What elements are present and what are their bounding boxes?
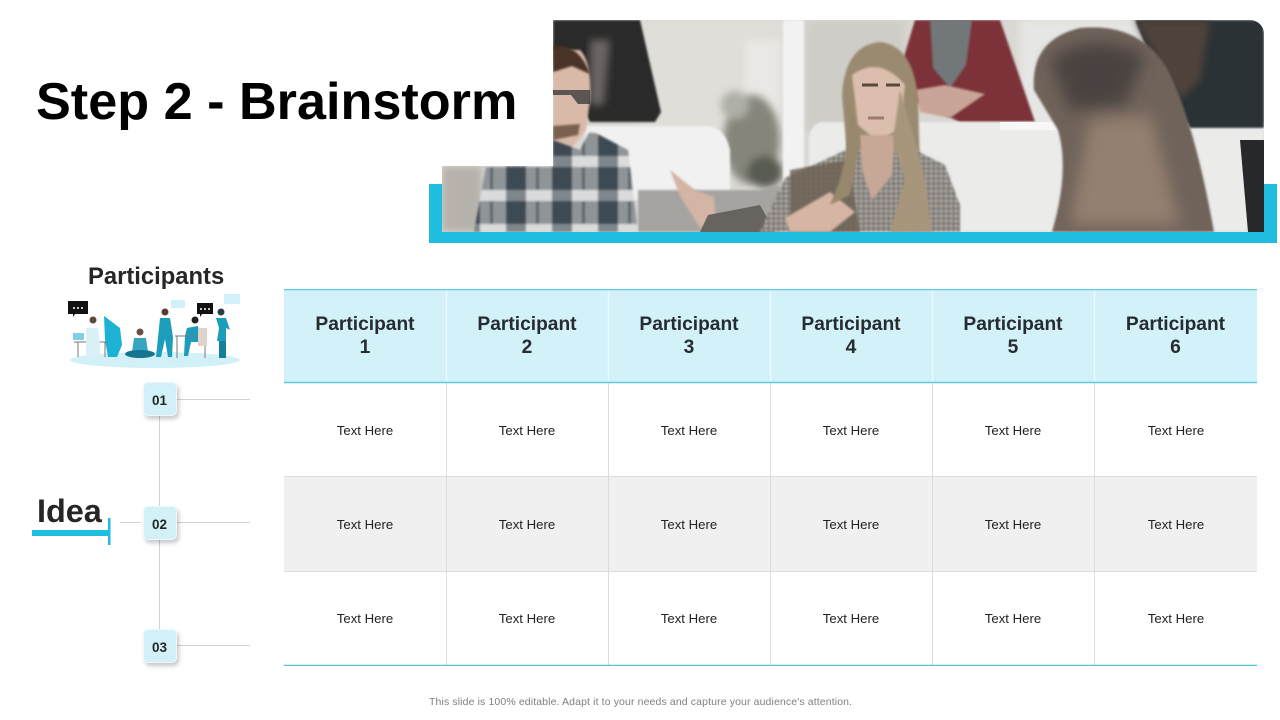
plant <box>721 91 783 188</box>
row 3 cells: Text Here <box>823 611 879 626</box>
illustration: team of participants <box>68 294 240 368</box>
row 1 cells <box>337 423 1204 438</box>
row 2 cells: Text Here <box>823 517 879 532</box>
row 3 cells: Text Here <box>499 611 555 626</box>
timeline connectors <box>120 399 250 646</box>
badge 03: 03 <box>152 640 167 655</box>
badge 03 <box>143 629 177 663</box>
red sweater man <box>903 20 1035 122</box>
row 2 cells: Text Here <box>985 517 1041 532</box>
cyan band behind photo <box>429 184 1277 243</box>
plaid shirt <box>474 130 638 232</box>
header row: 1 <box>360 337 370 358</box>
badge 01 <box>143 382 177 416</box>
header row: 4 <box>846 337 856 358</box>
row 2 cells: Text Here <box>499 517 555 532</box>
idea label: Idea <box>37 493 102 529</box>
dark laptop at right <box>1240 140 1264 232</box>
row 1 cells: Text Here <box>1148 423 1204 438</box>
row 2 cells: Text Here <box>1148 517 1204 532</box>
header row: Participant <box>1126 314 1225 335</box>
idea underline marker <box>32 518 110 545</box>
header row: 5 <box>1008 337 1018 358</box>
header row: Participant <box>477 314 577 335</box>
table <box>284 289 1257 666</box>
wall <box>442 20 1264 232</box>
footer note: This slide is 100% editable. Adapt it to your needs and capture your audience's attention. <box>429 696 852 708</box>
table rules <box>284 289 1257 666</box>
photo: meeting of colleagues <box>442 20 1264 232</box>
row 3 cells: Text Here <box>661 611 717 626</box>
row 3 cells: Text Here <box>1148 611 1204 626</box>
front woman hair <box>1034 27 1214 232</box>
header row: Participant <box>963 314 1063 335</box>
gesturing hand <box>670 170 716 228</box>
header row: 3 <box>684 337 694 358</box>
white sofa <box>585 126 730 200</box>
row 1 cells: Text Here <box>661 423 717 438</box>
row 1 cells: Text Here <box>985 423 1041 438</box>
white benches <box>809 122 1264 232</box>
header row: Participant <box>801 314 901 335</box>
man with glasses <box>553 50 590 150</box>
row 1 cells: Text Here <box>823 423 879 438</box>
row 3 cells <box>337 611 1204 626</box>
heading: participants: Participants <box>88 263 224 290</box>
pillar <box>783 20 804 190</box>
row 1 cells: Text Here <box>499 423 555 438</box>
row 2 cells: Text Here <box>661 517 717 532</box>
badge 02: 02 <box>152 517 167 532</box>
header row: Participant <box>639 314 739 335</box>
badge 01: 01 <box>152 393 167 408</box>
dark figure top right <box>1135 20 1264 128</box>
header row: 6 <box>1170 337 1181 358</box>
row 3 cells: Text Here <box>985 611 1041 626</box>
header row <box>284 290 1257 382</box>
row 3 cells: Text Here <box>337 611 393 626</box>
shaded row <box>284 477 1257 571</box>
row 1 cells: Text Here <box>337 423 393 438</box>
title: Step 2 - Brainstorm <box>36 73 517 131</box>
row 2 cells: Text Here <box>337 517 393 532</box>
woman in black jacket <box>553 20 661 122</box>
row 2 cells <box>337 517 1204 532</box>
header row: 2 <box>522 337 532 358</box>
badge 02 <box>143 506 177 540</box>
header row: Participant <box>315 314 415 335</box>
central woman <box>842 42 920 165</box>
